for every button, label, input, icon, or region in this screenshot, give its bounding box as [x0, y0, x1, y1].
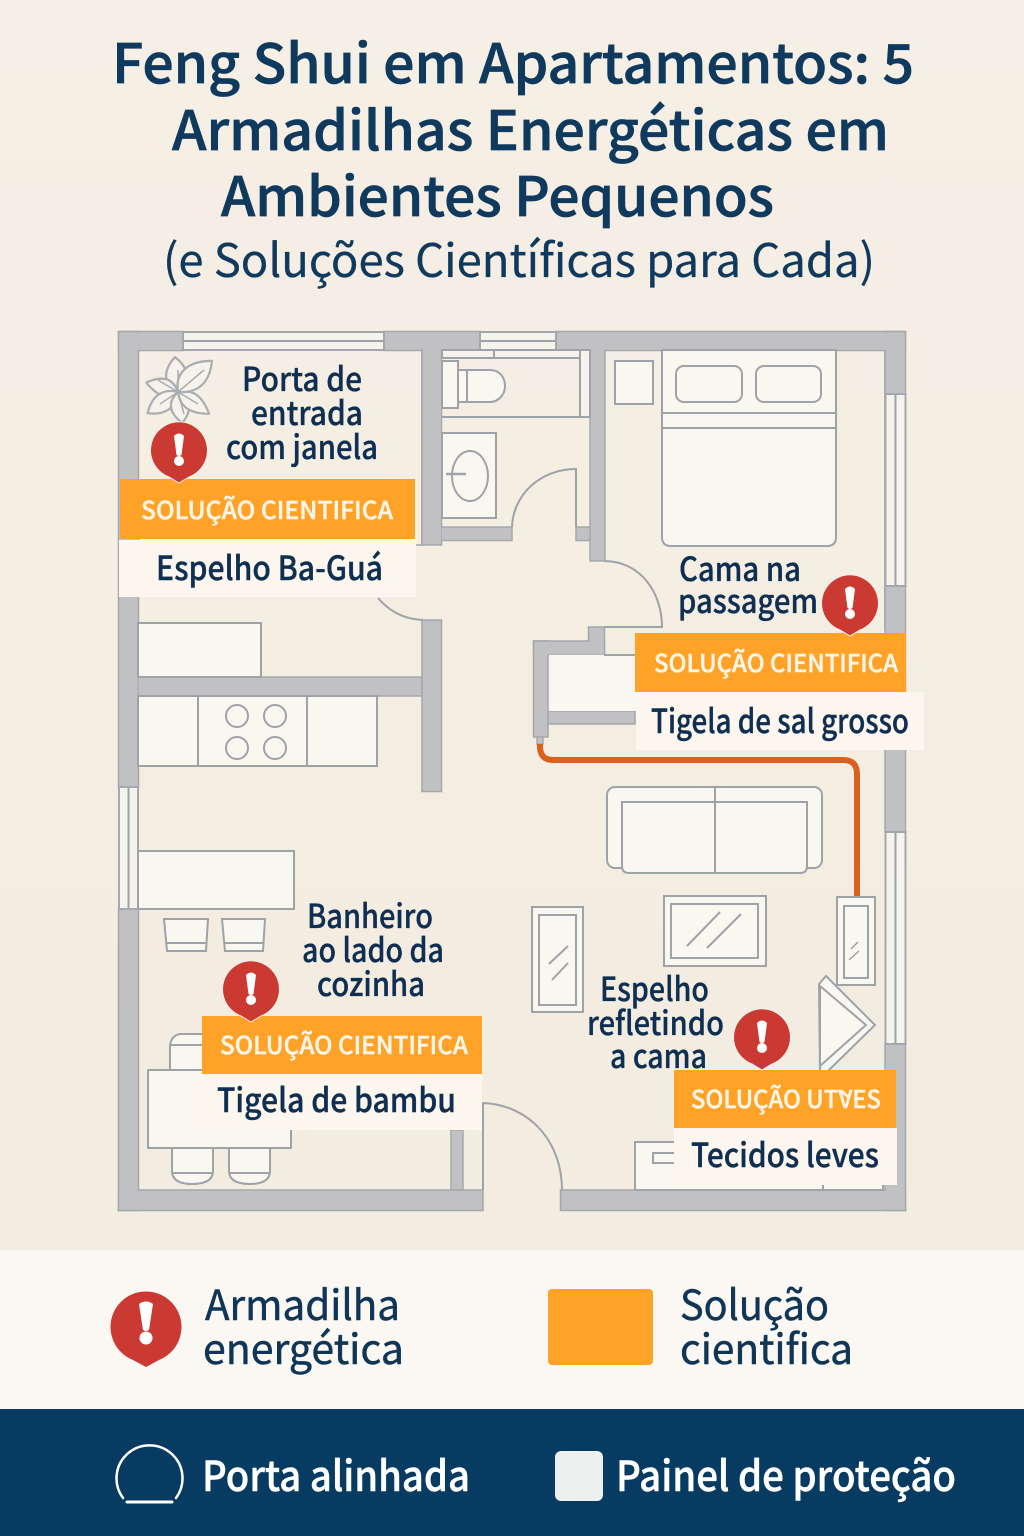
callout: Espelho Ba-Guá [119, 479, 416, 597]
callout: Tigela de sal grosso: Tigela de sal grosso [651, 695, 909, 743]
callout: Tecidos leves: Tecidos leves [691, 1129, 879, 1177]
label: Cama na passagem: Cama na [679, 543, 801, 591]
icon: warning pin 1 [150, 422, 208, 483]
dining furniture [138, 851, 294, 1184]
callout: Tigela de bambu: Tigela de bambu [217, 1074, 456, 1122]
icon: aligned door [116, 1445, 182, 1502]
title: Ambientes Pequenos [221, 153, 774, 232]
footer text: Painel de proteção: Painel de proteção [616, 1443, 956, 1503]
room interior outlines [138, 350, 885, 630]
callout: Tecidos leves [674, 1070, 897, 1185]
title [112, 20, 914, 291]
callout: Tigela de sal grosso [635, 633, 924, 750]
label: Banheiro ao lado da cozinha: cozinha [317, 958, 425, 1006]
icon: warning pin 2 [822, 575, 878, 636]
living room furniture [532, 787, 822, 1012]
title: Armadilhas Energéticas em [172, 87, 889, 166]
callout: Tigela de sal grosso: SOLUÇÃO CIENTIFICA [654, 645, 899, 680]
kitchen furniture [138, 623, 377, 766]
callout: Tigela de bambu: SOLUÇÃO CIENTIFICA [220, 1027, 469, 1062]
icon: decorative plant [143, 351, 219, 424]
bedroom furniture [549, 350, 836, 711]
footer text: Porta alinhada: Porta alinhada [202, 1443, 470, 1503]
legend text: Solução cientifica: cientifica [680, 1316, 853, 1376]
label: Porta de entrada com janela: entrada [251, 387, 363, 435]
callout: Espelho Ba-Guá: SOLUÇÃO CIENTIFICA [141, 492, 394, 527]
title: Feng Shui em Apartamentos: 5 [112, 20, 914, 99]
label: Porta de entrada com janela [226, 353, 378, 469]
legend text: Armadilha energética: Armadilha [205, 1272, 400, 1332]
icon: warning pin 4 [734, 1009, 790, 1070]
doors [378, 469, 662, 1190]
mirror near door [837, 897, 875, 985]
label: Banheiro ao lado da cozinha: Banheiro [307, 890, 433, 938]
icon: legend warning pin [110, 1291, 182, 1367]
legend panel [0, 1250, 1024, 1409]
legend text: Solução cientifica: Solução [680, 1272, 829, 1332]
title: (e Soluções Científicas para Cada) [163, 225, 875, 291]
walls [118, 332, 906, 1210]
callout: Tigela de bambu [202, 1016, 482, 1130]
label: Banheiro ao lado da cozinha: ao lado da [302, 924, 444, 972]
label: Espelho refletindo a cama: a cama [610, 1030, 707, 1078]
label: Espelho refletindo a cama: refletindo [587, 997, 724, 1045]
icon: legend orange swatch [548, 1289, 653, 1365]
label: Porta de entrada com janela: com janela [226, 421, 378, 469]
orange pipe line [540, 744, 857, 897]
label: Banheiro ao lado da cozinha [302, 890, 444, 1006]
callout: Tecidos leves: SOLUÇÃO UT̀VES [691, 1081, 881, 1116]
windows [119, 332, 906, 1044]
callout: Espelho Ba-Guá: Espelho Ba-Guá [156, 542, 383, 590]
label: Espelho refletindo a cama: Espelho [600, 963, 709, 1011]
door swing triangle [819, 976, 875, 1071]
label: Porta de entrada com janela: Porta de [242, 353, 362, 401]
footer band [0, 1409, 1024, 1536]
icon: warning pin 3 [222, 961, 280, 1022]
dresser [635, 1142, 883, 1190]
legend text: Armadilha energética [203, 1272, 404, 1376]
legend text: Solução cientifica [680, 1272, 853, 1376]
floor plan [118, 332, 906, 1210]
bathroom fixtures [442, 350, 590, 518]
label: Cama na passagem [678, 543, 818, 623]
legend text: Armadilha energética: energética [203, 1316, 404, 1376]
icon: protection panel [555, 1451, 603, 1501]
label: Cama na passagem: passagem [678, 575, 818, 623]
label: Espelho refletindo a cama [587, 963, 724, 1078]
